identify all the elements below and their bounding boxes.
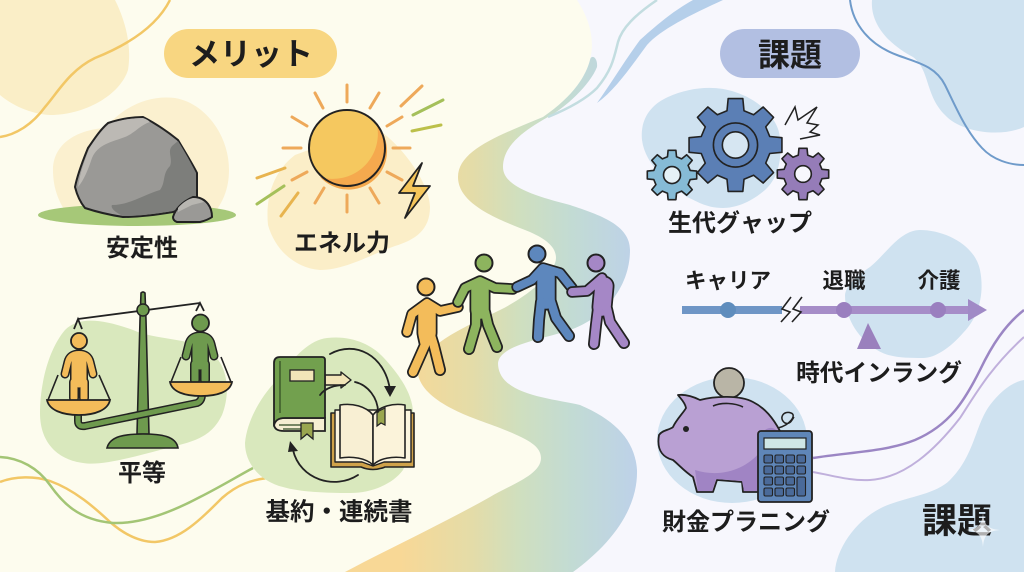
item: 時代インラング timeline bbox=[682, 230, 987, 387]
open book bbox=[331, 404, 414, 470]
timeline labels: キャリア bbox=[685, 269, 771, 293]
cycle arrows bbox=[288, 349, 396, 482]
gear backdrop blob bbox=[642, 88, 780, 208]
item: 基約・連続書 books bbox=[245, 337, 414, 526]
background: gradient ribbon divider bbox=[345, 57, 637, 572]
item: 平等 scale bbox=[40, 292, 232, 487]
icon: small blue gear bbox=[647, 150, 697, 200]
label: 基約・連続書 bbox=[266, 498, 412, 526]
break mark bbox=[781, 297, 802, 322]
heading pill: メリット: メリット bbox=[189, 37, 313, 72]
cream arrow bbox=[325, 372, 351, 388]
icon: coin bbox=[714, 368, 744, 398]
label: 生代グャップ bbox=[668, 209, 812, 237]
sun rays bbox=[257, 85, 443, 216]
bottom-right caption: 課題 bbox=[922, 502, 992, 541]
item: 生代グャップ gears bbox=[642, 88, 829, 237]
background: lower-left waves bbox=[0, 457, 267, 542]
label: 平等 bbox=[118, 460, 166, 487]
rock backdrop blob bbox=[53, 97, 229, 218]
item: 安定性 rock bbox=[38, 97, 236, 262]
timeline labels: 退職 bbox=[822, 269, 866, 293]
right figure bbox=[186, 314, 214, 380]
background: purple flow lines bbox=[813, 310, 1024, 480]
icon: calculator bbox=[758, 431, 812, 502]
triangle marker bbox=[857, 323, 881, 349]
icon: spark bbox=[785, 107, 820, 139]
piggy backdrop blob bbox=[657, 377, 807, 503]
background: top-right blob bbox=[872, 0, 1024, 133]
item: 財金プラニング piggy bank bbox=[657, 368, 830, 536]
scale base bbox=[107, 434, 178, 448]
left figure bbox=[65, 333, 93, 398]
label: 安定性 bbox=[106, 235, 178, 262]
scale beam bbox=[74, 303, 204, 329]
center: four people joining hands bbox=[407, 246, 624, 372]
right pan bbox=[170, 357, 232, 396]
sun backdrop blob bbox=[267, 133, 430, 270]
sparkle watermark bbox=[966, 513, 1000, 547]
person: orange bbox=[407, 278, 458, 372]
heading pill: メリット bbox=[164, 29, 337, 78]
heading pill: 課題 bbox=[720, 29, 860, 78]
icon: large rock bbox=[75, 117, 197, 217]
person: purple bbox=[572, 254, 624, 344]
scale column bbox=[137, 292, 149, 434]
left pan bbox=[47, 375, 110, 415]
scale arm bbox=[78, 394, 202, 426]
background: bottom-right blob bbox=[835, 380, 1024, 572]
person: green bbox=[458, 254, 513, 349]
label: エネル力 bbox=[294, 230, 390, 257]
timeline labels bbox=[685, 269, 961, 293]
item: エネル力 sun bbox=[257, 85, 443, 270]
pivot bbox=[137, 304, 149, 316]
heading pill: 課題: 課題 bbox=[758, 37, 822, 73]
icon: pig bbox=[658, 395, 794, 492]
icon: small purple gear bbox=[777, 148, 829, 200]
background: top-left blob and curve bbox=[0, 0, 170, 137]
background: top-right curve bbox=[850, 0, 1024, 165]
person: blue bbox=[517, 246, 572, 337]
ground bbox=[38, 204, 236, 226]
icon: lightning bbox=[399, 163, 430, 218]
background: cream left side bbox=[0, 0, 592, 572]
books backdrop blob bbox=[245, 337, 413, 493]
timeline labels: 介護 bbox=[917, 269, 961, 293]
scale backdrop blob bbox=[40, 321, 227, 464]
icon: large gear bbox=[689, 99, 782, 191]
label: 時代インラング bbox=[796, 359, 962, 387]
career line bbox=[682, 302, 782, 318]
label: 財金プラニング bbox=[662, 508, 830, 536]
retirement line and arrow bbox=[800, 299, 987, 321]
closed green book bbox=[274, 357, 325, 439]
background: teal and blue streams bbox=[548, 0, 723, 117]
icon: small rock bbox=[173, 197, 212, 222]
timeline backdrop blob bbox=[845, 230, 982, 358]
icon: sun bbox=[309, 110, 387, 190]
